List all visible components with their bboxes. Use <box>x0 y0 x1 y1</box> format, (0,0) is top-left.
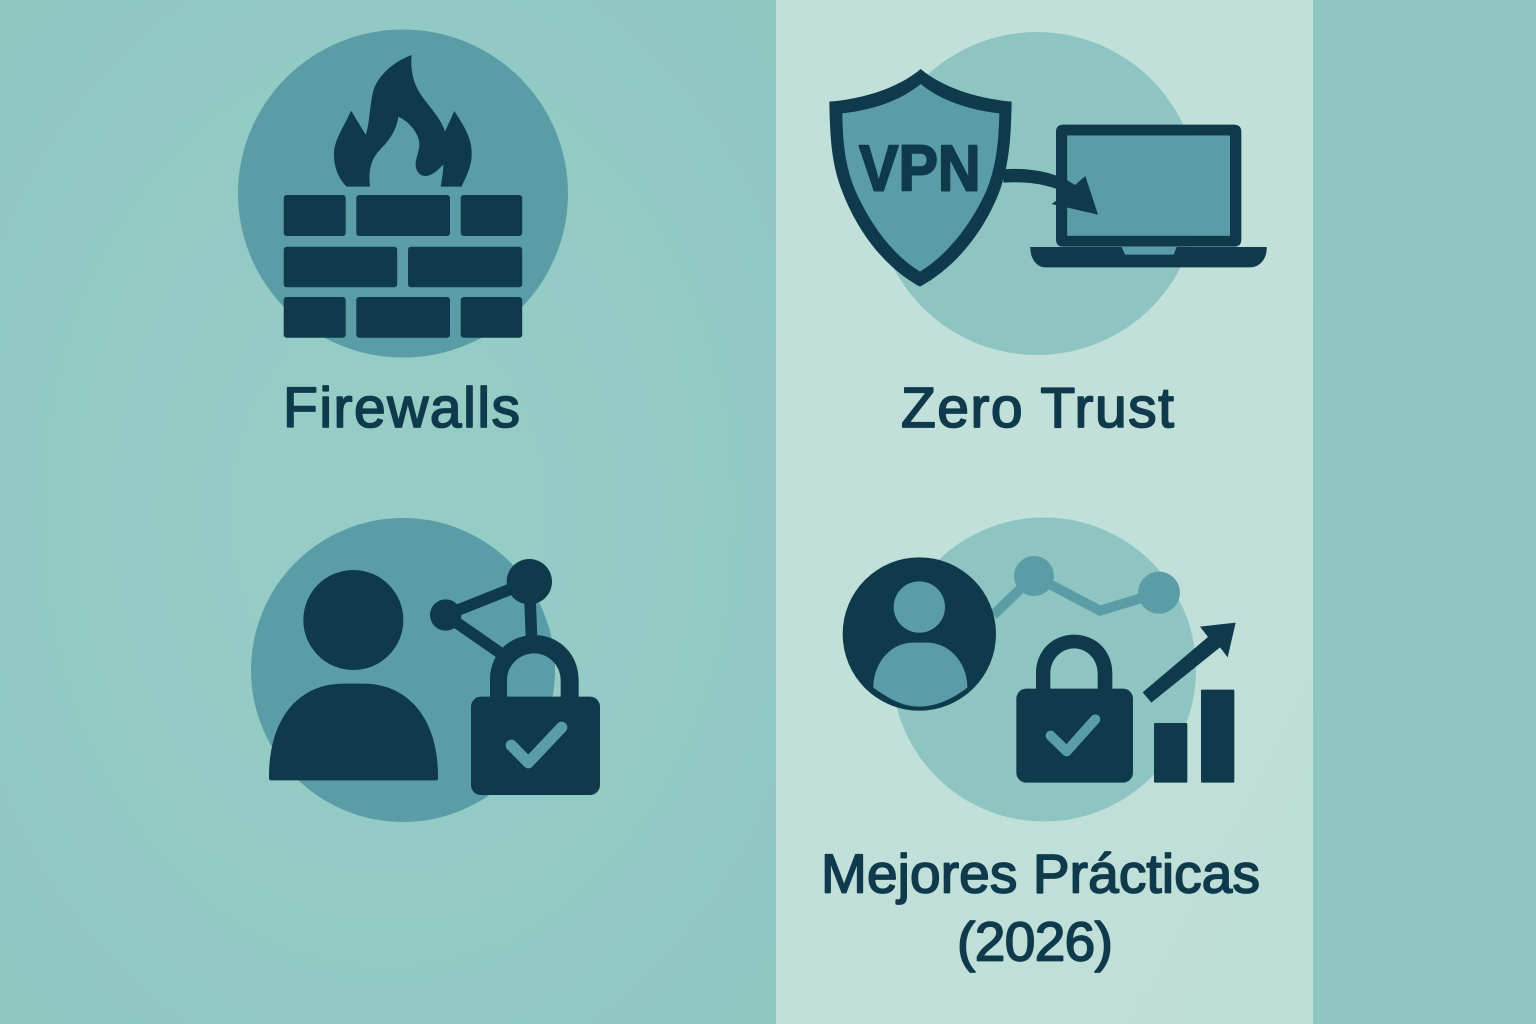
icon: VPN shield and laptop <box>829 69 1267 287</box>
laptop <box>1056 125 1241 247</box>
label: Mejores Prácticas (2026) <box>821 842 1260 972</box>
arrow <box>1003 169 1098 215</box>
label: Firewalls: Firewalls <box>283 376 520 440</box>
line chart <box>993 556 1180 615</box>
growth arrow <box>1143 623 1236 703</box>
label: Zero Trust: Zero Trust <box>901 376 1174 440</box>
panel: best practices <box>821 518 1260 972</box>
panel: centre light background <box>776 0 1313 1024</box>
user badge <box>843 557 996 711</box>
check mark <box>511 727 562 763</box>
user head <box>303 570 403 670</box>
icon: brick wall <box>284 195 522 338</box>
icon: user, lock and growth chart <box>843 556 1236 783</box>
label: Mejores Prácticas (2026): (2026) <box>957 910 1113 972</box>
panel: firewalls <box>238 30 568 440</box>
padlock <box>1016 635 1133 783</box>
icon: flame <box>334 55 472 187</box>
user body <box>269 684 438 780</box>
panel: zero trust <box>829 32 1267 440</box>
padlock shackle <box>490 635 579 700</box>
icon background circle: firewalls <box>238 30 568 358</box>
icon: user and network lock <box>269 559 600 795</box>
panel: left background <box>0 0 776 1024</box>
shield <box>829 69 1012 287</box>
panel: identity access <box>251 518 600 822</box>
icon background circle: zero trust <box>876 32 1198 355</box>
network nodes <box>430 559 552 654</box>
label: Mejores Prácticas (2026): Mejores Prácticas <box>821 842 1260 904</box>
VPN text: VPN <box>859 132 981 205</box>
bars <box>1154 690 1234 783</box>
icon background circle: identity <box>251 518 555 822</box>
arrow head over screen <box>1052 175 1098 215</box>
padlock body <box>471 697 600 795</box>
icon background circle: best practices <box>892 518 1196 822</box>
panel: right background <box>1313 0 1536 1024</box>
